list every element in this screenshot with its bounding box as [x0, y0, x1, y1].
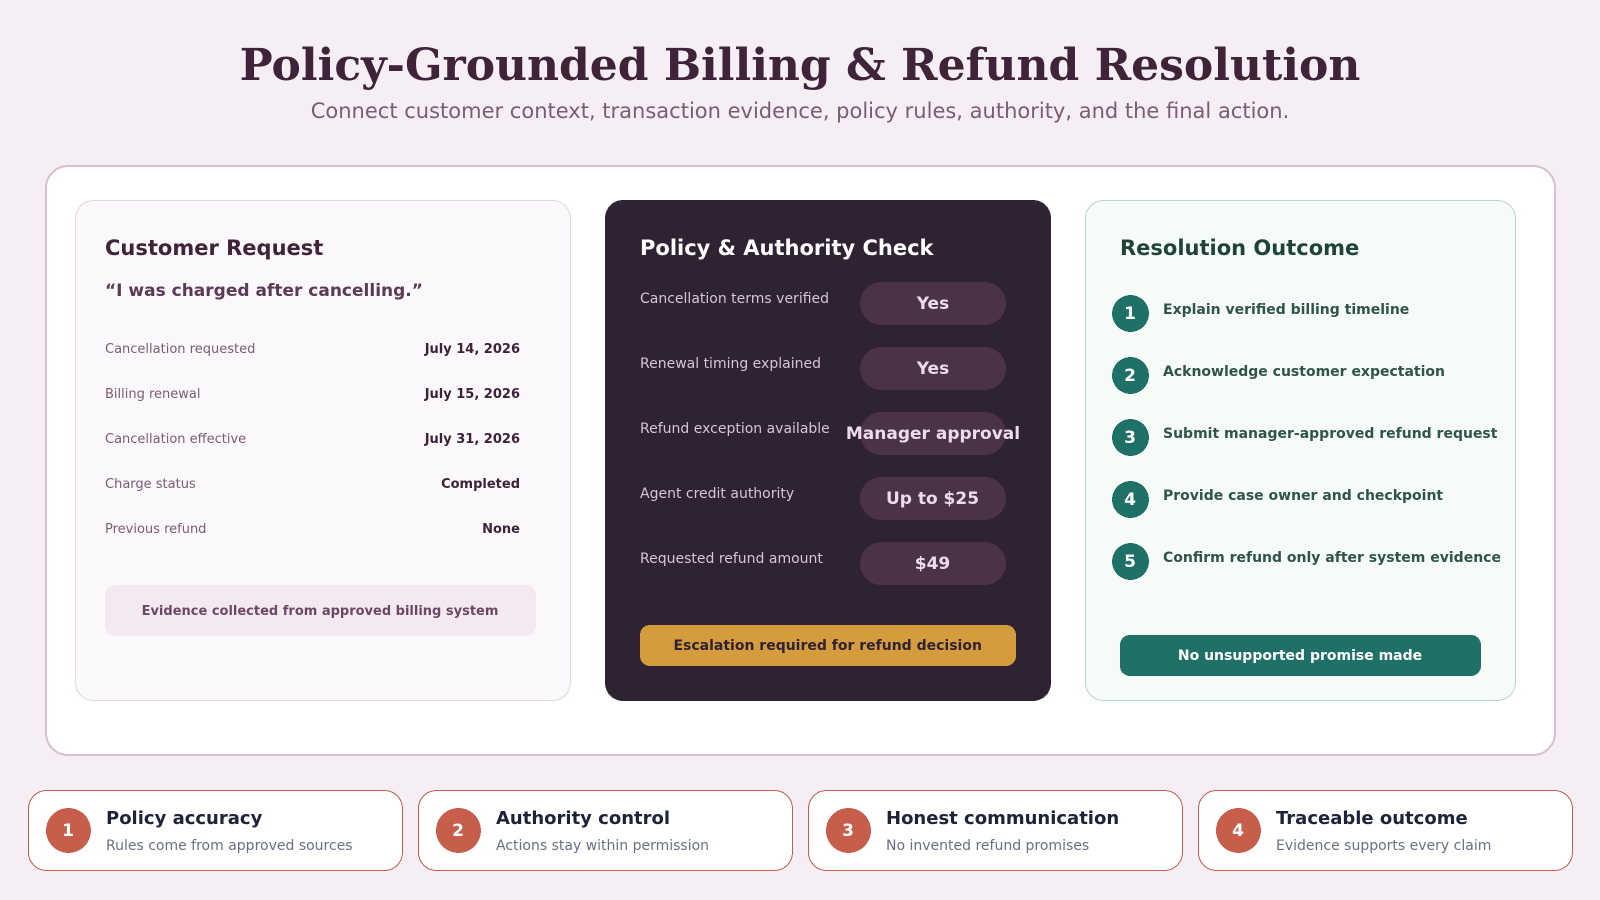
- step 2: Acknowledge customer expectation: [1163, 364, 1445, 380]
- row: renewal timing: [640, 347, 1006, 390]
- row: renewal timing: Yes: [916, 359, 949, 379]
- step 4: 4: [1124, 490, 1136, 510]
- card: traceable outcome: Traceable outcome: [1276, 808, 1468, 829]
- row: refund amount: Requested refund amount: [640, 551, 823, 567]
- step 3: Submit manager-approved refund request: [1163, 426, 1498, 442]
- evidence rows: None: [482, 522, 520, 537]
- evidence rows: July 15, 2026: [424, 387, 520, 402]
- step 4: [1112, 481, 1443, 518]
- evidence rows: July 14, 2026: [424, 342, 520, 357]
- step 2: [1112, 357, 1445, 394]
- main panel: [46, 166, 1555, 755]
- step 5: [1112, 543, 1501, 580]
- step 5: 5: [1124, 552, 1136, 572]
- evidence rows: Billing renewal: [105, 387, 200, 402]
- evidence rows: [105, 342, 520, 537]
- evidence note: [105, 585, 536, 636]
- step 1: 1: [1124, 304, 1136, 324]
- panel: resolution outcome: [1086, 200, 1516, 700]
- row: agent credit: Agent credit authority: [640, 486, 794, 502]
- card: authority control: 2: [452, 821, 464, 841]
- row: agent credit: [640, 477, 1006, 520]
- row: refund amount: $49: [915, 554, 950, 574]
- escalation banner: [640, 625, 1016, 666]
- quote: “I was charged after cancelling.”: [105, 281, 423, 301]
- escalation banner: Escalation required for refund decision: [673, 638, 982, 654]
- card: honest communication: 3: [842, 821, 854, 841]
- card: traceable outcome: 4: [1232, 821, 1244, 841]
- evidence rows: July 31, 2026: [424, 432, 520, 447]
- outcome banner: No unsupported promise made: [1178, 648, 1422, 664]
- card: policy accuracy: Rules come from approved sources: [106, 838, 353, 854]
- evidence rows: Previous refund: [105, 522, 206, 537]
- evidence rows: Cancellation effective: [105, 432, 246, 447]
- row: renewal timing: Renewal timing explained: [640, 356, 821, 372]
- row: refund exception: Manager approval: [846, 424, 1020, 444]
- card: policy accuracy: 1: [62, 821, 74, 841]
- row: refund exception: [640, 412, 1020, 455]
- card: authority control: Authority control: [496, 808, 670, 829]
- step 2: 2: [1124, 366, 1136, 386]
- step 1: [1112, 295, 1409, 332]
- step 3: [1112, 419, 1498, 456]
- card: authority control: [418, 790, 792, 870]
- evidence note: Evidence collected from approved billing system: [142, 604, 498, 619]
- row: agent credit: Up to $25: [886, 489, 979, 509]
- card: honest communication: [808, 790, 1182, 870]
- heading: customer request: Customer Request: [105, 236, 323, 260]
- row: cancellation terms: [640, 282, 1006, 325]
- card: policy accuracy: Policy accuracy: [106, 808, 263, 829]
- subtitle: Connect customer context, transaction evidence, policy rules, authority, and the final action.: [311, 99, 1289, 123]
- evidence rows: Charge status: [105, 477, 196, 492]
- title: Policy-Grounded Billing & Refund Resolution: [240, 40, 1360, 91]
- evidence rows: Cancellation requested: [105, 342, 255, 357]
- card: traceable outcome: [1198, 790, 1572, 870]
- card: honest communication: No invented refund promises: [886, 838, 1089, 854]
- step 1: Explain verified billing timeline: [1163, 302, 1409, 318]
- card: policy accuracy: [28, 790, 402, 870]
- panel: policy and authority check: [605, 200, 1051, 701]
- card: honest communication: Honest communication: [886, 808, 1119, 829]
- panel: customer request: [76, 200, 570, 700]
- card: authority control: Actions stay within permission: [496, 838, 709, 854]
- row: cancellation terms: Yes: [916, 294, 949, 314]
- card: traceable outcome: Evidence supports every claim: [1276, 838, 1491, 854]
- row: refund exception: Refund exception available: [640, 421, 830, 437]
- evidence rows: Completed: [441, 477, 520, 492]
- step 4: Provide case owner and checkpoint: [1163, 488, 1443, 504]
- step 3: 3: [1124, 428, 1136, 448]
- outcome banner: [1120, 635, 1481, 676]
- step 5: Confirm refund only after system evidence: [1163, 550, 1501, 566]
- heading: resolution outcome: Resolution Outcome: [1120, 236, 1359, 260]
- heading: policy check: Policy & Authority Check: [640, 236, 935, 260]
- row: cancellation terms: Cancellation terms verified: [640, 291, 829, 307]
- row: refund amount: [640, 542, 1006, 585]
